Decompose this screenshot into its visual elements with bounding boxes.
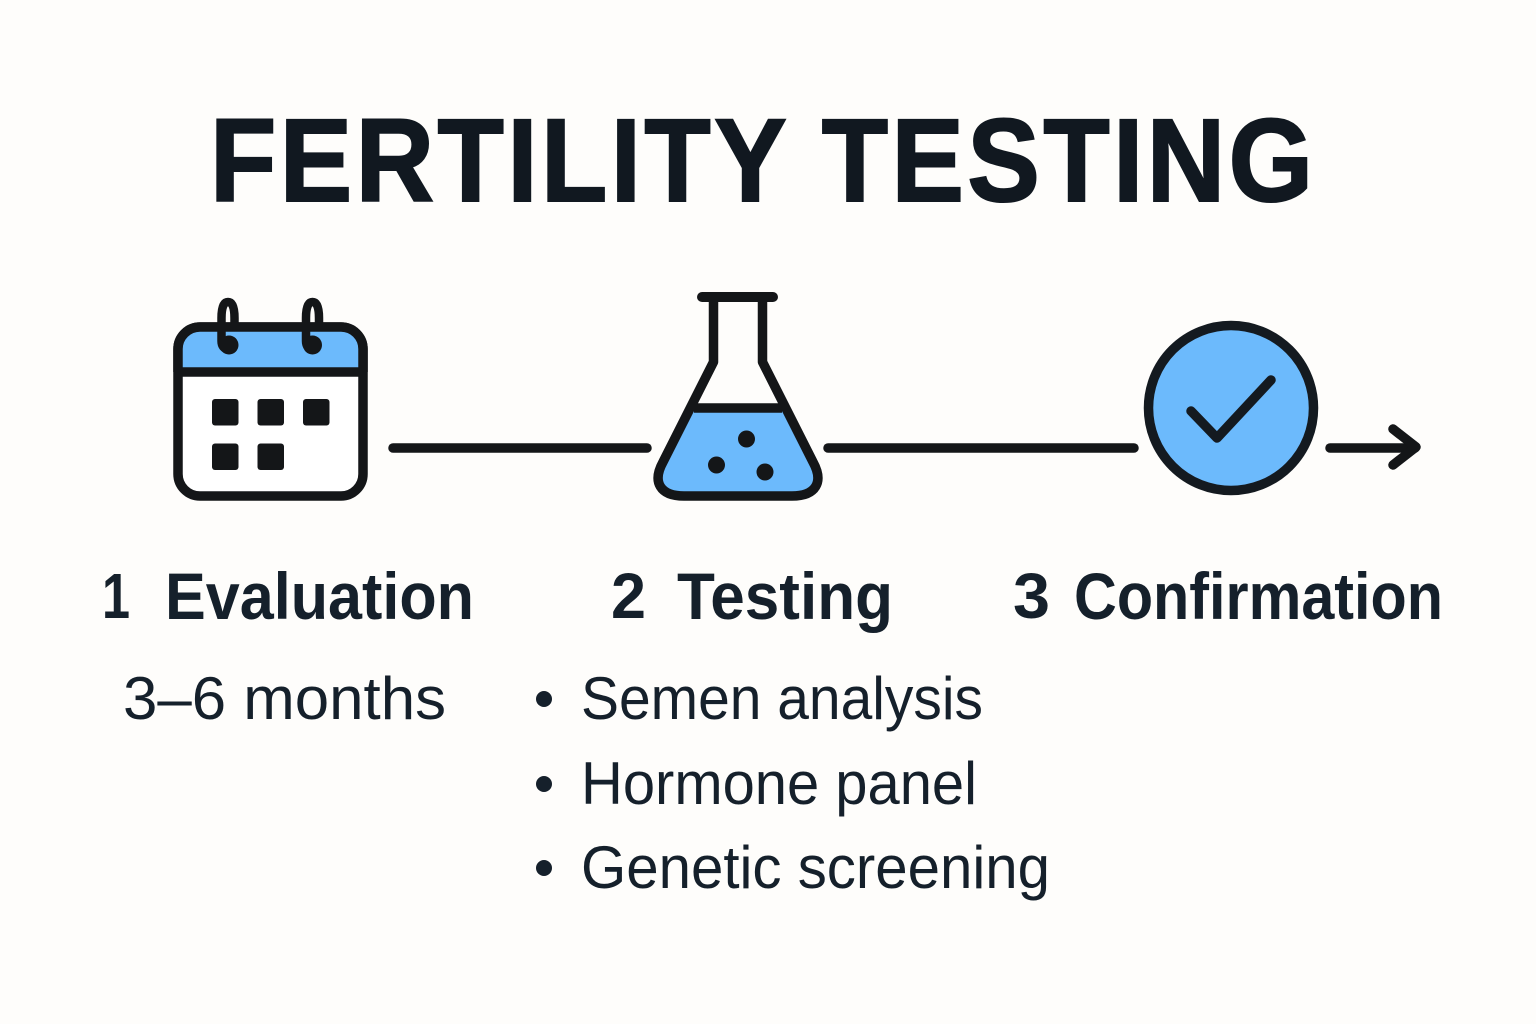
- step 3 heading: 3: [1013, 560, 1050, 632]
- connector line: testing to confirmation: [828, 443, 1134, 453]
- step 1 heading: 1: [102, 560, 130, 632]
- title: FERTILITY TESTING: [210, 95, 1313, 227]
- step 2 heading: Testing: [677, 559, 893, 633]
- step 1 duration: 3–6 months: [123, 665, 446, 732]
- step 2 bullet list: Genetic screening: [581, 834, 1050, 901]
- icon: flask: [658, 297, 818, 496]
- arrow: [1330, 429, 1416, 465]
- step 2 heading: 2: [611, 560, 646, 632]
- icon: check circle: [1148, 326, 1314, 490]
- connector line: evaluation to testing: [393, 443, 647, 453]
- step 2 bullet list: Hormone panel: [581, 750, 977, 817]
- step 3 heading: Confirmation: [1074, 559, 1443, 633]
- step 2 bullet list: Semen analysis: [581, 665, 983, 732]
- icon: calendar: [178, 302, 363, 496]
- step 1 heading: Evaluation: [165, 559, 474, 633]
- step 2 bullet list: [536, 665, 1050, 901]
